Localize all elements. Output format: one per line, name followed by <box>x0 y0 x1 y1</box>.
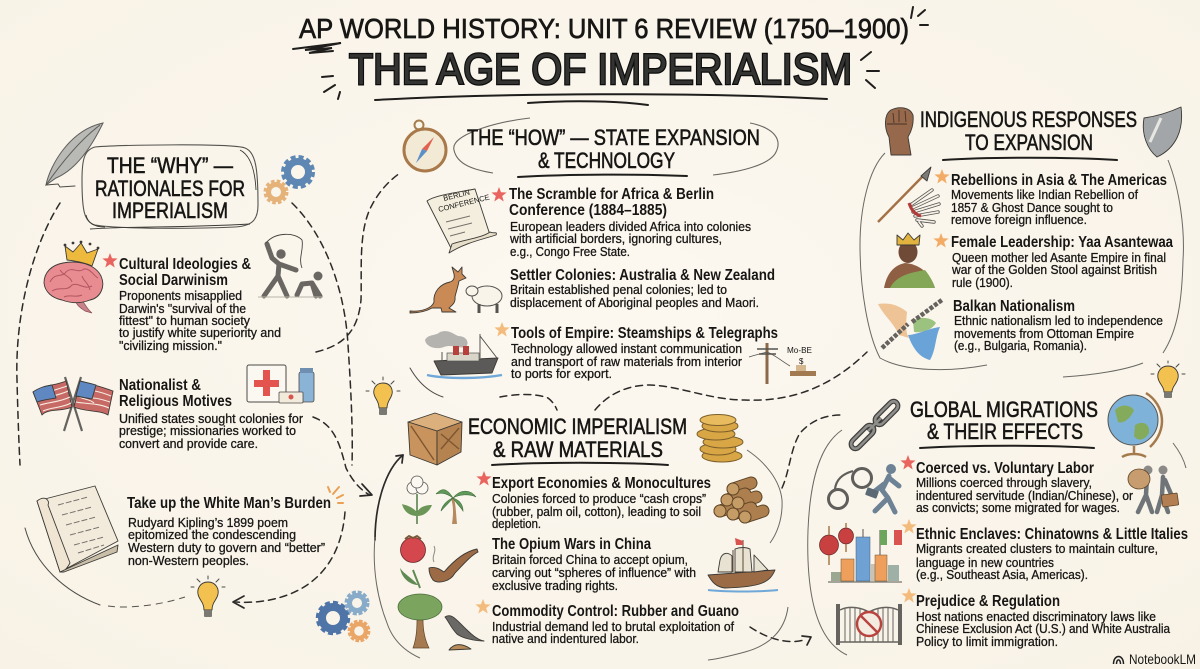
text: settler colonies <box>510 267 775 310</box>
text: cultural ideologies <box>119 256 281 353</box>
icon: steamship <box>425 331 502 378</box>
heading with oval: THE “HOW” — STATE EXPANSION <box>467 125 760 150</box>
heading: & THEIR EFFECTS <box>927 419 1083 444</box>
item: ethnic enclaves <box>820 519 1188 582</box>
item: rebellions <box>878 167 1167 227</box>
text: prejudice <box>916 593 1171 649</box>
text: export economies: Colonies forced to produce “cash crops” <box>492 491 706 506</box>
text: export economies: (rubber, palm oil, cotton), leading to soil <box>492 504 701 519</box>
text: ethnic enclaves <box>916 526 1188 582</box>
panel: global migrations and their effects <box>808 393 1188 655</box>
panel outline <box>808 430 1186 655</box>
star marker <box>901 519 917 534</box>
icon: handcuffs and walking figure <box>828 464 899 512</box>
item: tools of empire <box>425 322 816 384</box>
text: balkan nationalism: (e.g., Bulgaria, Romania). <box>954 338 1087 353</box>
text: prejudice: Policy to limit immigration. <box>916 634 1058 649</box>
icon: telegraph pole: Mo-BE <box>787 345 812 355</box>
connector: dashed end of burden arc <box>108 597 185 607</box>
arrow: nationalist motives to economic imperialism <box>313 417 372 496</box>
text: nationalist motives: prestige; missionaries worked to <box>119 423 296 438</box>
icon: orange spark <box>328 487 343 503</box>
icon: rubber tree <box>398 594 442 648</box>
text: nationalist motives: Unified states sought colonies for <box>119 411 304 426</box>
text: burden: epitomized the condescending <box>128 527 296 542</box>
text: prejudice: Chinese Exclusion Act (U.S.) and White Australia <box>916 621 1171 636</box>
text: coerced labor: Coerced vs. Voluntary Labor <box>916 460 1094 477</box>
text: scramble: European leaders divided Africa into colonies <box>510 219 751 234</box>
text: coerced labor: Millions coerced through slavery, <box>916 475 1092 490</box>
text: scramble: with artificial borders, ignoring cultures, <box>509 231 722 246</box>
star marker <box>494 322 510 336</box>
heading: & RAW MATERIALS <box>493 437 663 462</box>
panel: economic imperialism and raw materials <box>374 413 788 660</box>
item: export economies <box>402 471 763 531</box>
text: tools of empire <box>511 325 778 381</box>
heading with oval <box>454 118 778 177</box>
text: settler colonies: displacement of Aboriginal peoples and Maori. <box>510 295 759 310</box>
text: nationalist motives: convert and provide care. <box>119 436 258 451</box>
icon: compass <box>404 120 446 171</box>
text: rebellions <box>951 172 1167 227</box>
text: female leadership <box>951 234 1173 290</box>
icon: queen yaa asantewaa <box>884 233 935 288</box>
icon: telegraph pole: $ <box>799 357 804 366</box>
text: opium wars: The Opium Wars in China <box>492 536 651 553</box>
text: coerced labor: as convicts; some migrated for wages. <box>916 500 1120 515</box>
text: ethnic enclaves: (e.g., Southeast Asia, Americas). <box>916 567 1088 582</box>
icon: log pile <box>714 483 763 523</box>
connector: dashed line from why panel to economics <box>292 203 352 465</box>
text: scramble: e.g., Congo Free State. <box>510 244 630 259</box>
text: cultural ideologies: Social Darwinism <box>119 272 228 289</box>
text: female leadership: rule (1900). <box>952 275 1013 290</box>
text: female leadership: Queen mother led Asante Empire in final <box>952 250 1166 265</box>
text: burden: Western duty to govern and “better” <box>128 540 325 555</box>
item: cultural ideologies <box>44 234 323 353</box>
text: coerced labor <box>916 460 1134 515</box>
icon: berlin conference scroll: CONFERENCE <box>437 193 490 214</box>
icon: light bulb lower-left <box>191 576 225 617</box>
text: cultural ideologies: Cultural Ideologies & <box>119 256 251 273</box>
icon: three gears <box>318 592 369 641</box>
text: nationalist motives: Nationalist & <box>119 377 201 394</box>
icon: sailing ship <box>708 538 778 592</box>
icon: open book <box>37 486 118 572</box>
item: white man's burden <box>37 486 343 572</box>
icon: raised fist <box>885 108 913 155</box>
heading with oval: & TECHNOLOGY <box>538 148 675 173</box>
icon: light bulb right <box>1151 361 1185 398</box>
icon: palm tree <box>436 490 476 524</box>
icon: whip figures <box>258 234 323 297</box>
icon: poppy flower <box>400 536 426 588</box>
text: cultural ideologies: Darwin's "survival of the <box>119 301 246 316</box>
text: prejudice: Prejudice & Regulation <box>916 593 1060 610</box>
icon: guano bird <box>445 616 484 650</box>
text: balkan nationalism <box>953 298 1163 353</box>
icon: smoking pipe <box>429 546 478 582</box>
text: opium wars: Britain forced China to accept opium, <box>492 552 688 567</box>
item: settler colonies <box>410 267 775 313</box>
icon: medical kit <box>247 365 314 403</box>
text: tools of empire: to ports for export. <box>511 366 612 381</box>
heading box: IMPERIALISM <box>112 198 228 223</box>
arrow: burden loop to light bulb <box>233 512 345 608</box>
text: burden: Rudyard Kipling’s 1899 poem <box>128 515 288 530</box>
text: commodity control: Industrial demand led to brutal exploitation of <box>492 619 734 634</box>
panel: how - state expansion and technology <box>404 118 816 397</box>
text: rebellions: Movements like Indian Rebellion of <box>951 187 1138 202</box>
text: scramble <box>509 186 751 259</box>
text: tools of empire: Tools of Empire: Steamships & Telegraphs <box>511 325 778 342</box>
connector: left dashed arc <box>17 203 60 465</box>
star marker <box>900 455 916 470</box>
icon: gears <box>265 157 313 203</box>
text: nationalist motives: Religious Motives <box>119 393 232 410</box>
item: female leadership <box>884 233 1173 290</box>
text: commodity control: native and indentured labor. <box>492 631 639 646</box>
connector: dashed wave from economics to indigenous <box>595 352 867 410</box>
text: export economies: depletion. <box>492 516 541 531</box>
heading <box>920 107 1137 160</box>
icon: coin stack <box>697 414 743 462</box>
star marker <box>475 599 491 614</box>
text: rebellions: Rebellions in Asia & The Americas <box>951 172 1167 189</box>
icon: balkan map and broken chains <box>878 300 942 360</box>
icon: crossed flags <box>33 377 113 431</box>
title block <box>293 7 928 105</box>
icon: spear and headdress <box>878 167 939 226</box>
heading: TO EXPANSION <box>965 130 1093 155</box>
heading box: THE “WHY” — <box>107 153 233 178</box>
heading: INDIGENOUS RESPONSES <box>920 107 1137 132</box>
text: burden <box>127 495 331 568</box>
text: scramble: Conference (1884–1885) <box>509 202 667 219</box>
text: balkan nationalism: movements from Ottoman Empire <box>954 326 1134 341</box>
text: opium wars: exclusive trading rights. <box>492 578 618 593</box>
item: commodity control <box>398 594 739 650</box>
heading box <box>82 145 258 229</box>
text: settler colonies: Britain established penal colonies; led to <box>510 282 727 297</box>
text: ethnic enclaves: language in new countries <box>916 555 1054 570</box>
text: cultural ideologies: fittest" to human society <box>119 313 250 328</box>
heading box: RATIONALES FOR <box>95 176 245 201</box>
text: cultural ideologies: "civilizing mission." <box>119 338 222 353</box>
icon: brain with crown <box>44 241 103 313</box>
text: nationalist motives <box>119 377 304 451</box>
text: cultural ideologies: to justify white superiority and <box>119 325 281 340</box>
text: prejudice: Host nations enacted discriminatory laws like <box>916 609 1156 624</box>
item: prejudice and regulation <box>836 588 1171 649</box>
star marker <box>933 233 949 248</box>
item: balkan nationalism <box>878 298 1163 360</box>
icon: lanterns, city and italian flag <box>820 523 902 582</box>
text: balkan nationalism: Balkan Nationalism <box>953 298 1075 315</box>
text: commodity control: Commodity Control: Rubber and Guano <box>492 603 739 620</box>
text: tools of empire: and transport of raw materials from interior <box>511 354 743 369</box>
panel outline left <box>374 450 788 660</box>
icon: wooden crate <box>408 413 462 465</box>
icon: migrants with luggage <box>1128 466 1179 512</box>
icon: chain link <box>851 401 898 449</box>
star marker <box>901 588 917 602</box>
text: cultural ideologies: Proponents misapplied <box>119 288 242 303</box>
icon: feather quill <box>46 123 103 187</box>
text: settler colonies: Settler Colonies: Australia & New Zealand <box>510 267 775 284</box>
icon: kangaroo <box>410 267 466 313</box>
icon: globe <box>1108 393 1162 457</box>
icon: sheep <box>466 286 502 313</box>
heading: ECONOMIC IMPERIALISM <box>468 414 687 439</box>
icon: berlin conference scroll <box>427 188 496 253</box>
icon: berlin conference scroll: BERLIN <box>442 188 471 203</box>
text: ethnic enclaves: Migrants created clusters to maintain culture, <box>916 541 1158 556</box>
star marker <box>102 253 118 268</box>
star marker <box>491 187 507 202</box>
text: opium wars <box>492 536 696 593</box>
arrow: economics to migrations <box>750 627 811 645</box>
icon: light bulb center-left <box>366 377 400 415</box>
connector: dashed econ to migrations <box>782 415 842 488</box>
text: burden: non-Western peoples. <box>128 553 249 568</box>
item: coerced labor <box>828 455 1179 515</box>
heading: GLOBAL MIGRATIONS <box>910 397 1098 422</box>
connector: thin arc under burden panel <box>25 528 100 605</box>
text: rebellions: 1857 & Ghost Dance sought to <box>951 200 1113 215</box>
icon: telegraph pole <box>749 343 816 384</box>
connector: dashed line from why panel up to how panel <box>316 173 400 352</box>
text: coerced labor: indentured servitude (Indian/Chinese), or <box>916 488 1134 503</box>
star marker <box>476 471 492 486</box>
text: opium wars: carving out “spheres of influence” with <box>492 565 696 580</box>
star marker <box>934 169 950 184</box>
text: female leadership: war of the Golden Stool against British <box>951 262 1157 277</box>
text: rebellions: remove foreign influence. <box>951 212 1087 227</box>
text: export economies: Export Economies & Monocultures <box>492 475 711 492</box>
connector: dashed line into economic panel <box>500 394 557 410</box>
panel outline <box>860 153 1183 377</box>
text: commodity control <box>492 603 739 646</box>
icon: cotton plant <box>402 476 432 524</box>
item: nationalist and religious motives <box>33 365 314 451</box>
text: export economies <box>492 475 711 531</box>
thin arc beneath how panel <box>410 368 443 397</box>
text: balkan nationalism: Ethnic nationalism led to independence <box>954 313 1163 328</box>
heading <box>910 397 1098 448</box>
subtitle: AP WORLD HISTORY: UNIT 6 REVIEW (1750–1900) <box>299 13 909 44</box>
heading <box>468 414 687 465</box>
item: opium wars <box>400 536 778 593</box>
icon: shield <box>1143 107 1182 157</box>
text: burden: Take up the White Man’s Burden <box>127 495 331 512</box>
text: tools of empire: Technology allowed instant communication <box>511 341 742 356</box>
text: scramble: The Scramble for Africa & Berlin <box>509 186 714 203</box>
item: scramble for africa <box>427 186 751 259</box>
title underlines and sparks <box>293 7 928 105</box>
icon: closed gate with prohibition sign <box>836 604 902 645</box>
main title: THE AGE OF IMPERIALISM <box>349 45 852 94</box>
panel: indigenous responses to expansion <box>860 107 1183 377</box>
